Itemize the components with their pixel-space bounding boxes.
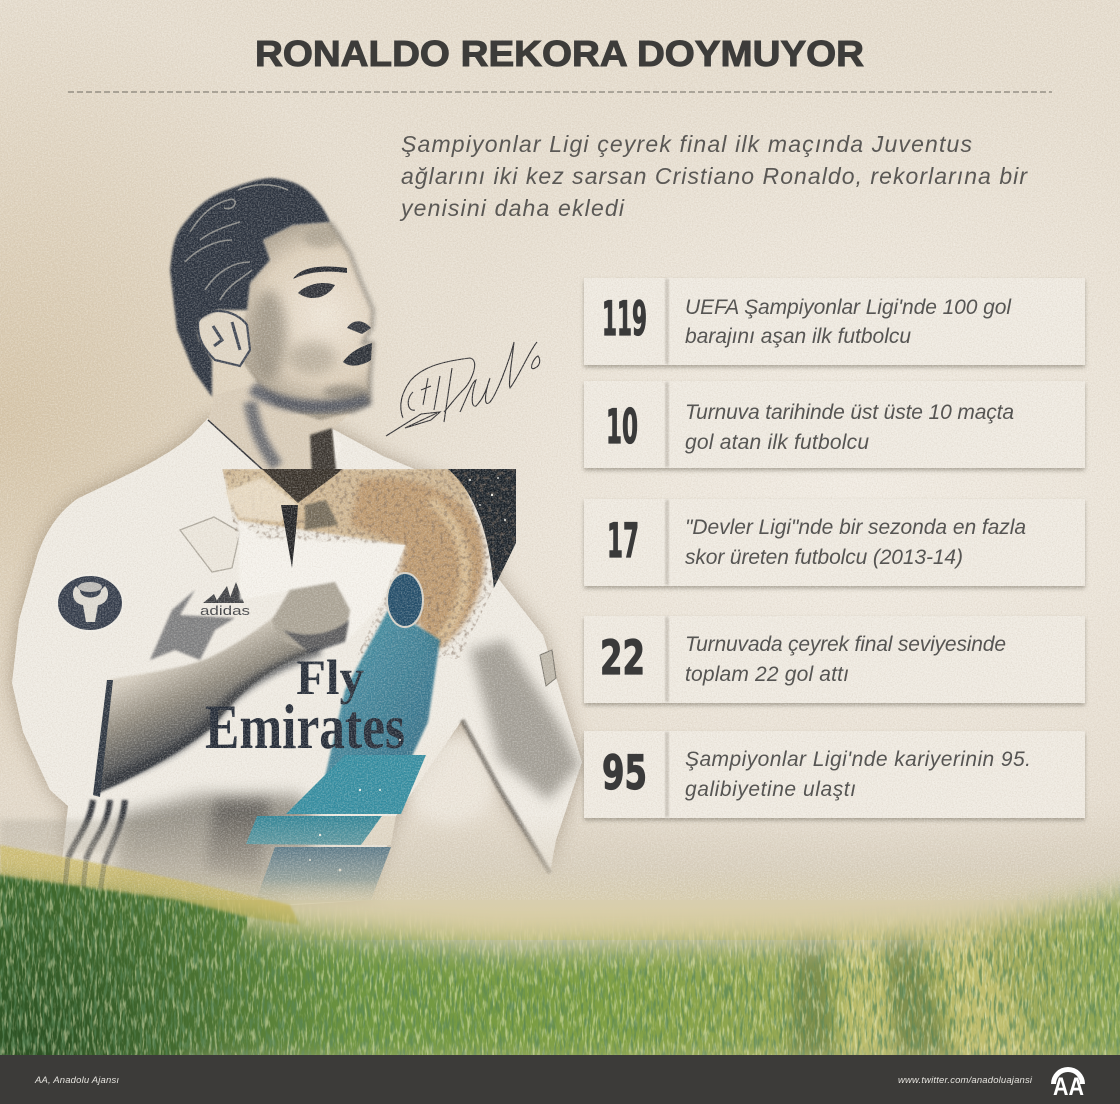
- stat text 17: 17: [607, 514, 639, 569]
- source credit: AA, Anadolu Ajansı: [34, 1075, 119, 1086]
- stat card panel 119: [584, 278, 1085, 365]
- shirt stripes: [68, 800, 125, 865]
- forearm dark edge: [105, 650, 320, 782]
- seven bottom bars: [246, 755, 426, 906]
- stat text 17: [607, 514, 1026, 569]
- fist shadow: [283, 620, 349, 654]
- soft white between torso and arm: [405, 735, 495, 825]
- club crest: [180, 517, 240, 572]
- faded stripes through mist: [64, 858, 104, 905]
- stat text 22: Turnuvada çeyrek final seviyesinde: [685, 633, 1006, 656]
- adidas logo: adidas: [200, 603, 251, 618]
- yellow turf strip: [0, 845, 300, 925]
- twitter link: www.twitter.com/anadoluajansi: [898, 1075, 1033, 1086]
- stat text 10: 10: [606, 400, 638, 455]
- stat text 119: barajını aşan ilk futbolcu: [685, 325, 911, 348]
- seven overlay: [205, 469, 516, 906]
- stat text 10: [606, 400, 1014, 455]
- ear: [198, 311, 250, 366]
- stat text 119: UEFA Şampiyonlar Ligi'nde 100 gol: [685, 296, 1012, 319]
- hair: [170, 178, 330, 397]
- grass field: [0, 850, 1120, 1056]
- sleeve edge: [93, 680, 113, 797]
- ear inner: [213, 322, 240, 350]
- stat text 95: [602, 746, 1031, 801]
- stat text 95: Şampiyonlar Ligi'nde kariyerinin 95.: [685, 748, 1031, 771]
- collar shadow right: [305, 500, 338, 530]
- seven inner white: [238, 520, 405, 640]
- number cell dividers: [665, 279, 669, 817]
- stat text 17: "Devler Ligi"nde bir sezonda en fazla: [685, 516, 1026, 539]
- stat card panel 17: [584, 499, 1085, 586]
- stat text 10: gol atan ilk futbolcu: [685, 431, 869, 454]
- beard and neck shadow: [250, 402, 336, 502]
- collar tie: [281, 505, 298, 568]
- stat text 17: skor üreten futbolcu (2013-14): [685, 546, 963, 569]
- seven nebula: [222, 469, 516, 659]
- AA logo: AA: [1053, 1073, 1084, 1101]
- stat card panel 22: [584, 616, 1085, 703]
- real madrid sleeve badge: [387, 573, 423, 627]
- light mown patches: [840, 930, 1040, 1056]
- stars: [309, 477, 506, 871]
- darker tracks: [790, 925, 950, 1056]
- stat card panel 95: [584, 731, 1085, 818]
- player illustration: [12, 178, 582, 908]
- jaw shadow: [252, 388, 368, 407]
- intro text: yenisini daha ekledi: [399, 195, 625, 221]
- footer bar: [0, 1055, 1120, 1104]
- collar line: [208, 420, 336, 502]
- face: [235, 222, 373, 420]
- seven top band tan: [222, 469, 480, 545]
- stat text 95: 95: [602, 746, 647, 801]
- shoulder fold shadow: [150, 590, 235, 660]
- lower torso shading: [110, 795, 320, 905]
- small collar tip: [333, 429, 342, 460]
- face outline halo: [330, 222, 373, 413]
- title: RONALDO REKORA DOYMUYOR: [255, 33, 864, 74]
- stat card panel 10: [584, 381, 1085, 468]
- stat text 95: galibiyetine ulaştı: [685, 778, 856, 801]
- stat text 22: toplam 22 gol attı: [685, 663, 849, 686]
- distant stadium crowd: [0, 820, 190, 852]
- neck: [208, 383, 350, 502]
- right sleeve shading: [470, 640, 580, 800]
- stat text 119: [602, 292, 1012, 348]
- hair highlights: [185, 185, 288, 300]
- inner right arm shadow: [462, 720, 550, 873]
- jersey body: [12, 418, 582, 908]
- intro text: Şampiyonlar Ligi çeyrek final ilk maçında Juventus: [401, 131, 972, 157]
- fist: [272, 582, 350, 650]
- sponsor text: Fly: [296, 649, 364, 705]
- eyebrow and eye: [293, 266, 347, 298]
- sleeve patch: [540, 650, 556, 686]
- sponsor text: Emirates: [205, 691, 405, 762]
- adidas logo: [200, 582, 251, 618]
- nose and mouth: [343, 321, 372, 366]
- seven top dark corner: [448, 469, 516, 590]
- signature: [386, 342, 540, 436]
- forearm: [95, 592, 350, 795]
- stat text 22: [600, 631, 1006, 686]
- stat text 10: Turnuva tarihinde üst üste 10 maçta: [685, 401, 1014, 424]
- sponsor text: [205, 649, 405, 762]
- neck overlap dark: [262, 469, 342, 503]
- stat text 22: 22: [600, 631, 645, 686]
- intro text: [399, 131, 1028, 221]
- collar left: [225, 478, 298, 522]
- horizon mist: [0, 815, 1120, 940]
- cheek and temple shading: [250, 228, 367, 399]
- stat text 119: 119: [602, 292, 647, 347]
- intro text: ağlarını iki kez sarsan Cristiano Ronaldo, rekorlarına bir: [401, 163, 1028, 189]
- seven teal diagonal: [322, 610, 440, 790]
- UCL badge: [57, 575, 123, 631]
